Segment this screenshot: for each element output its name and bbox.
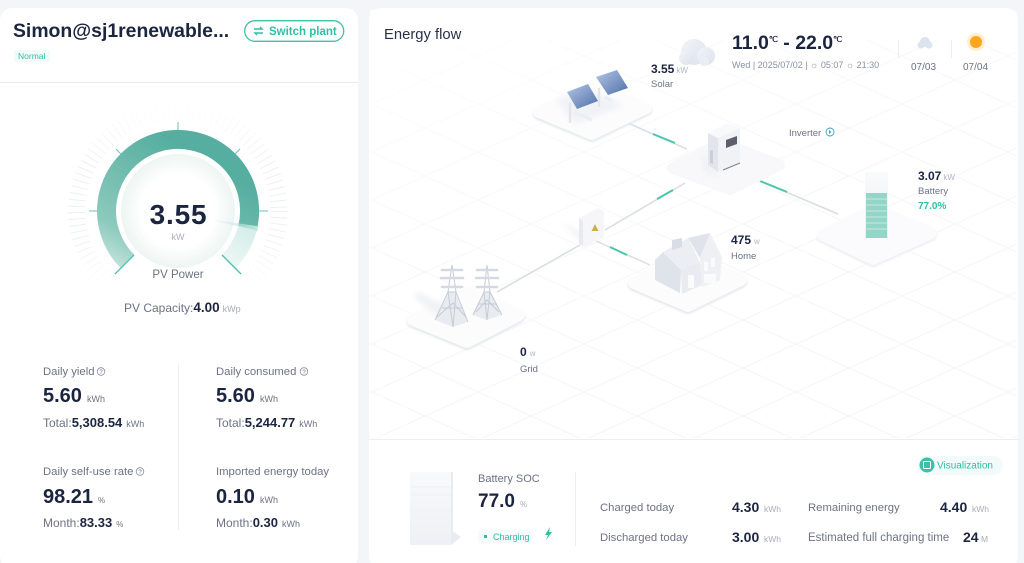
visualization button: Visualization bbox=[937, 460, 993, 472]
weather: today: ℃ bbox=[769, 35, 778, 44]
weather: today: Wed | 2025/07/02 | ☼ 05:07 ☼ 21:30 bbox=[732, 60, 879, 70]
stat: daily consumed: Total:5,244.77 kWh bbox=[216, 415, 317, 430]
switch plant button bbox=[245, 21, 344, 41]
weather: today: - 22.0 bbox=[778, 32, 833, 54]
stat: imported energy today: 0.10 bbox=[216, 486, 255, 508]
stat: daily self-use rate: Month:83.33 % bbox=[43, 515, 123, 530]
label: solar: 3.55kW bbox=[651, 62, 688, 76]
stat: daily yield: ? bbox=[99, 370, 103, 376]
stat: daily consumed bbox=[216, 366, 317, 430]
battery SOC: Battery SOC bbox=[478, 473, 540, 485]
stat: imported energy today: kWh bbox=[260, 495, 278, 505]
label: grid: Grid bbox=[520, 364, 538, 375]
status badge: normal: Normal bbox=[18, 51, 46, 61]
stat: daily consumed: 5.60 bbox=[216, 385, 255, 407]
stat: imported energy today: Month:0.30 kWh bbox=[216, 515, 300, 530]
stat: daily yield: Total:5,308.54 kWh bbox=[43, 415, 144, 430]
forecast: 07/03: 07/03 bbox=[911, 62, 936, 73]
icon: charging bolt bbox=[545, 527, 552, 540]
battery SOC: 77.0 bbox=[478, 491, 515, 512]
battery stack illustration bbox=[410, 472, 461, 545]
metric: estimated full charging time: 24 bbox=[963, 529, 979, 545]
metric: discharged today: kWh bbox=[764, 534, 781, 544]
stat: imported energy today: Imported energy today bbox=[216, 466, 329, 478]
metric: charged today: 4.30 bbox=[732, 499, 759, 515]
label: inverter: Inverter bbox=[789, 128, 821, 139]
node: home bbox=[634, 233, 741, 308]
panel: plant overview bbox=[0, 8, 358, 563]
metric: remaining energy: 4.40 bbox=[940, 499, 967, 515]
metric: discharged today: Discharged today bbox=[600, 532, 688, 544]
label: solar: Solar bbox=[651, 79, 673, 90]
battery SOC: % bbox=[520, 500, 527, 509]
stat: daily yield: 5.60 bbox=[43, 385, 82, 407]
forecast: 07/04: 07/04 bbox=[963, 62, 988, 73]
icon: large cloud bbox=[679, 39, 715, 66]
metric: estimated full charging time: Estimated full charging time bbox=[808, 532, 949, 544]
stat: daily consumed: Daily consumed bbox=[216, 366, 296, 378]
switch plant button: Switch plant bbox=[269, 26, 337, 38]
label: battery: 77.0% bbox=[918, 201, 946, 212]
node: meter box bbox=[562, 208, 604, 247]
gauge: PV power bbox=[77, 110, 279, 312]
status chip: charging bbox=[478, 530, 531, 543]
gauge: PV power: kW bbox=[172, 232, 185, 242]
gauge label: PV Power bbox=[152, 269, 204, 281]
stat: daily self-use rate: ? bbox=[138, 470, 142, 476]
label: battery bbox=[918, 169, 955, 212]
stat: daily self-use rate: 98.21 bbox=[43, 486, 93, 508]
stat: daily self-use rate bbox=[43, 466, 144, 530]
stat: daily self-use rate: % bbox=[98, 496, 105, 505]
stat: daily consumed: kWh bbox=[260, 394, 278, 404]
metric: discharged today bbox=[600, 529, 781, 545]
metric: charged today bbox=[600, 499, 781, 515]
stat: daily yield bbox=[43, 366, 144, 430]
stat: daily consumed: ? bbox=[302, 370, 306, 376]
node: inverter bbox=[673, 123, 779, 189]
forecast: 07/04 bbox=[952, 33, 988, 73]
metric: estimated full charging time: M bbox=[981, 534, 988, 544]
weather: today: 11.0 bbox=[732, 32, 769, 54]
battery SOC bbox=[478, 473, 540, 512]
forecast: 07/03 bbox=[898, 37, 936, 73]
label: solar bbox=[651, 62, 688, 90]
visualization button bbox=[918, 456, 1003, 475]
metric: remaining energy: Remaining energy bbox=[808, 502, 900, 514]
plant name heading: Simon@sj1renewable... bbox=[13, 20, 229, 42]
label: battery: Battery bbox=[918, 186, 948, 197]
PV capacity: PV Capacity:4.00 kWp bbox=[124, 300, 241, 315]
metric: estimated full charging time bbox=[808, 529, 988, 545]
stat: daily self-use rate: Daily self-use rate bbox=[43, 466, 133, 478]
status badge: normal bbox=[14, 50, 50, 62]
label: home: 475 w bbox=[731, 233, 760, 247]
metric: remaining energy bbox=[808, 499, 989, 515]
node: grid towers bbox=[413, 265, 519, 344]
connector lines bbox=[497, 123, 838, 292]
metric: discharged today: 3.00 bbox=[732, 529, 759, 545]
panel: energy flow bbox=[369, 8, 1018, 563]
label: battery: 3.07kW bbox=[918, 169, 955, 183]
stat: daily yield: kWh bbox=[87, 394, 105, 404]
metric: charged today: Charged today bbox=[600, 502, 674, 514]
gauge reading: 3.55 bbox=[150, 199, 207, 230]
label: home bbox=[731, 233, 760, 262]
weather: today: ℃ bbox=[833, 35, 842, 44]
stat: daily yield: Daily yield bbox=[43, 366, 94, 378]
heading: energy flow: Energy flow bbox=[384, 27, 462, 43]
node: battery bbox=[823, 172, 931, 261]
stat: imported energy today bbox=[216, 466, 329, 530]
weather: today bbox=[732, 32, 879, 70]
status chip: charging: Charging bbox=[493, 532, 530, 542]
label: grid: 0 w bbox=[520, 345, 536, 359]
node: solar bbox=[539, 70, 646, 136]
metric: charged today: kWh bbox=[764, 504, 781, 514]
label: grid bbox=[520, 345, 538, 375]
label: home: Home bbox=[731, 251, 756, 262]
metric: remaining energy: kWh bbox=[972, 504, 989, 514]
